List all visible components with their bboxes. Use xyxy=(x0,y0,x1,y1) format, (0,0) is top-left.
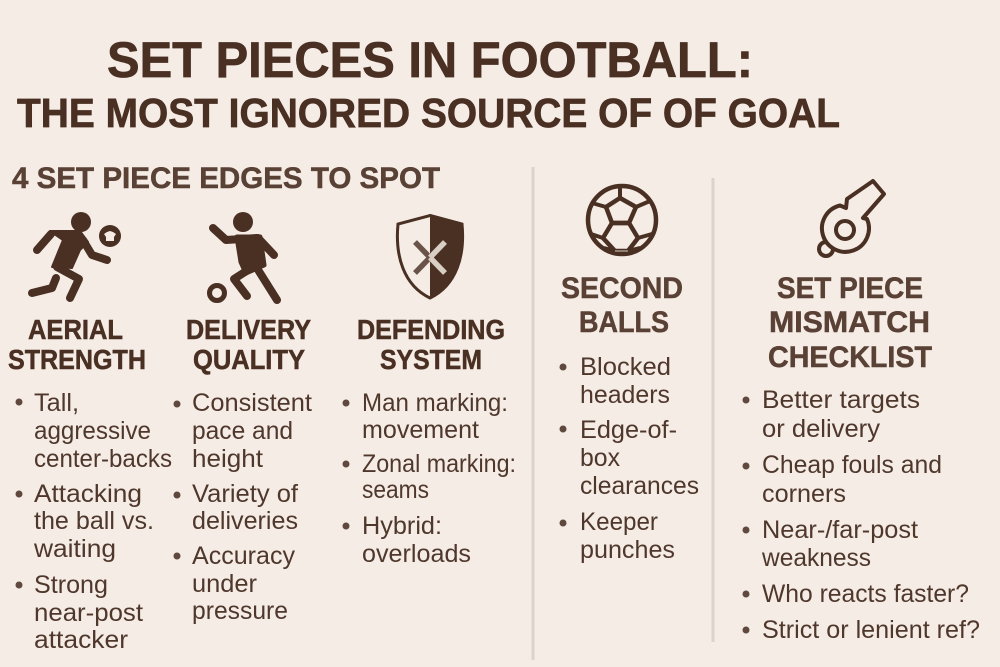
heading: defending system: DEFENDING xyxy=(357,314,505,345)
heading: second balls xyxy=(561,272,683,339)
list: checklist: Who reacts faster? xyxy=(762,580,969,608)
list: delivery quality: pace and xyxy=(192,417,293,445)
list: aerial strength: Tall, xyxy=(34,389,79,417)
list: aerial strength: center-backs xyxy=(34,445,172,473)
heading: delivery quality: QUALITY xyxy=(193,344,305,375)
list: aerial strength: aggressive xyxy=(34,417,151,445)
list: defending system: movement xyxy=(362,416,479,444)
list: aerial strength: Strong xyxy=(34,571,108,599)
title xyxy=(17,31,840,136)
list: checklist: Strict or lenient ref? xyxy=(762,616,980,644)
list: second balls: Keeper xyxy=(580,508,658,536)
list: defending system xyxy=(342,389,516,568)
list: checklist: or delivery xyxy=(762,415,881,443)
heading: aerial strength xyxy=(8,314,146,375)
list: delivery quality: height xyxy=(192,445,263,473)
list: checklist: weakness xyxy=(761,544,871,572)
icon: shield with cross xyxy=(397,214,464,299)
heading: checklist: SET PIECE xyxy=(777,272,923,305)
list: aerial strength: waiting xyxy=(33,535,116,563)
list: second balls: punches xyxy=(580,536,675,564)
heading: second balls: BALLS xyxy=(579,306,669,339)
list: second balls: clearances xyxy=(580,472,699,500)
list: delivery quality: Variety of xyxy=(192,480,298,508)
list: delivery quality: under xyxy=(192,570,257,598)
list: delivery quality: Accuracy xyxy=(192,542,295,570)
icon: player kicking ball xyxy=(210,212,277,300)
list: aerial strength: near-post xyxy=(34,599,143,627)
list: second balls: box xyxy=(580,444,620,472)
heading: checklist: CHECKLIST xyxy=(768,341,932,374)
list: delivery quality: Consistent xyxy=(192,389,312,417)
title: SET PIECES IN FOOTBALL: xyxy=(107,31,753,88)
icon: jumping player with ball xyxy=(32,212,121,298)
list: aerial strength xyxy=(16,389,172,654)
list: aerial strength: the ball vs. xyxy=(34,507,154,535)
heading: aerial strength: AERIAL xyxy=(28,314,123,345)
heading: defending system: SYSTEM xyxy=(380,344,482,375)
panel: aerial strength xyxy=(8,212,172,654)
heading: second balls: SECOND xyxy=(561,272,683,305)
list: aerial strength: attacker xyxy=(34,626,128,654)
list: defending system: seams xyxy=(362,476,429,504)
section heading: 4 SET PIECE EDGES TO SPOT xyxy=(12,162,440,195)
list: checklist: Cheap fouls and xyxy=(762,451,942,479)
heading: delivery quality: DELIVERY xyxy=(186,314,311,345)
list: delivery quality xyxy=(174,389,312,625)
list: checklist: Near-/far-post xyxy=(762,516,918,544)
heading: aerial strength: STRENGTH xyxy=(8,344,146,375)
list: delivery quality: deliveries xyxy=(192,507,298,535)
list: delivery quality: pressure xyxy=(192,597,288,625)
heading: delivery quality xyxy=(186,314,311,375)
list: defending system: overloads xyxy=(362,540,471,568)
icon: whistle xyxy=(819,181,884,256)
list: aerial strength: Attacking xyxy=(34,480,142,508)
heading: checklist xyxy=(768,272,932,374)
title: THE MOST IGNORED SOURCE OF OF GOAL xyxy=(17,90,840,136)
list: second balls: Edge-of- xyxy=(580,416,677,444)
heading: defending system xyxy=(357,314,505,375)
list: checklist: corners xyxy=(762,480,846,508)
panel: second balls xyxy=(560,186,699,564)
list: second balls xyxy=(560,353,699,564)
panel: set piece mismatch checklist xyxy=(742,181,980,644)
icon: football xyxy=(588,186,656,254)
list: checklist: Better targets xyxy=(762,386,920,414)
list: defending system: Hybrid: xyxy=(362,512,442,540)
panel: delivery quality xyxy=(174,212,312,625)
list: second balls: headers xyxy=(580,381,670,409)
list: defending system: Man marking: xyxy=(362,389,508,417)
panel: defending system xyxy=(342,214,516,568)
heading: checklist: MISMATCH xyxy=(769,306,930,339)
list: second balls: Blocked xyxy=(580,353,671,381)
list: checklist xyxy=(742,386,980,644)
list: defending system: Zonal marking: xyxy=(362,450,516,478)
